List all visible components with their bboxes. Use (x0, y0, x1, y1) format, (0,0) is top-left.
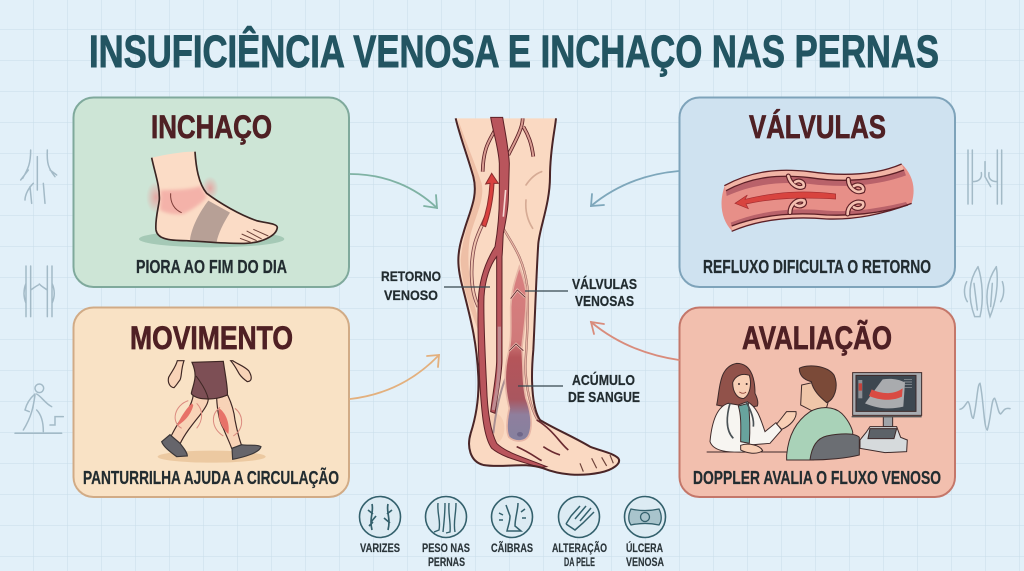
caption: movimento: PANTURRILHA AJUDA A CIRCULAÇÃO (83, 467, 339, 488)
symptom: câibras (491, 496, 533, 555)
caption: VARIZES (360, 543, 400, 555)
arrow: movimento to leg (350, 355, 439, 399)
panel: inchaço (74, 98, 349, 287)
icon: hand with skin change (566, 506, 594, 530)
illustration: doctor, patient and ultrasound (707, 363, 922, 460)
caption: ALTERAÇÃO (552, 542, 607, 555)
side icons right (960, 150, 1010, 430)
label: acúmulo de sangue (518, 371, 640, 406)
caption: CÃIBRAS (491, 542, 533, 555)
caption: ÚLCERA (626, 542, 663, 555)
caption: inchaço: PIORA AO FIM DO DIA (136, 257, 287, 277)
icon: swollen foot (139, 152, 284, 247)
symptom: peso nas pernas: PERNAS (428, 557, 465, 569)
caption: válvulas: REFLUXO DIFICULTA O RETORNO (703, 257, 931, 277)
icon: walking legs (158, 361, 266, 463)
symptom: alteração da pele: DA PELE (564, 557, 595, 569)
symptom: varizes (360, 496, 400, 555)
symptom: alteração da pele (552, 496, 607, 569)
label: acúmulo de sangue: ACÚMULO (572, 371, 635, 389)
icon: leg cramp (499, 503, 526, 531)
icon: varicose veins (368, 504, 392, 530)
icon: ulcer (629, 509, 661, 525)
arrow: válvulas to leg (591, 171, 679, 206)
pooled blood in varicose vein (505, 267, 531, 441)
veins (472, 117, 568, 468)
red return arrow (482, 173, 498, 227)
arrow: inchaço to leg (350, 174, 437, 208)
icon: vein with valves (722, 164, 914, 231)
panel: avaliação (680, 308, 955, 497)
panel: movimento (74, 308, 349, 497)
symptom: úlcera venosa (624, 496, 666, 569)
label: retorno venoso: RETORNO (381, 268, 441, 284)
symptom: úlcera venosa: VENOSA (626, 557, 664, 569)
label: válvulas venosas: VÁLVULAS (572, 276, 637, 293)
label: acúmulo de sangue: DE SANGUE (568, 389, 640, 406)
icon: walking person (15, 384, 63, 433)
caption: avaliação: DOPPLER AVALIA O FLUXO VENOSO (693, 468, 941, 488)
icon: valve in vein (968, 150, 1002, 204)
heading: inchaço: INCHAÇO (151, 109, 272, 145)
label: retorno venoso: VENOSO (384, 287, 438, 303)
icon: legs with veins (21, 150, 57, 203)
label: válvulas venosas (525, 276, 637, 310)
side icons left (15, 150, 63, 433)
label: válvulas venosas: VENOSAS (575, 293, 634, 310)
central leg illustration (456, 117, 619, 475)
arrow: avaliação to leg (591, 322, 679, 360)
panel: válvulas (680, 98, 955, 287)
symptom: peso nas pernas (422, 496, 470, 569)
label: retorno venoso (381, 268, 490, 303)
caption: PESO NAS (422, 543, 470, 555)
heading: movimento: MOVIMENTO (130, 320, 293, 356)
icon: valve (24, 266, 54, 317)
heading: avaliação: AVALIAÇÃO (742, 320, 892, 356)
icon: calf muscles (964, 267, 1004, 317)
icon: heavy legs (434, 503, 456, 533)
icon: pulse wave (960, 383, 1010, 430)
heading: válvulas: VÁLVULAS (749, 109, 886, 145)
